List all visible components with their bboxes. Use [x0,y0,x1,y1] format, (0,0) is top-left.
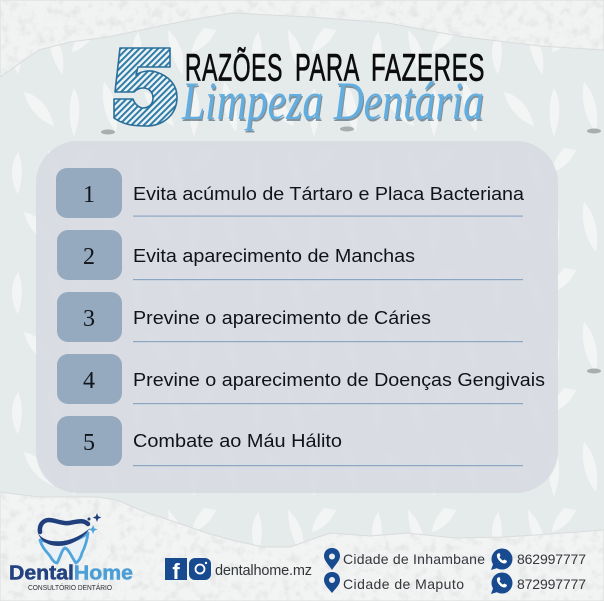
heading line one [185,46,485,90]
phone 2: 872997777 [517,576,586,592]
item 4 [57,354,545,404]
item 3: 3 [83,306,95,332]
item 2 [57,230,523,280]
icon: facebook: f [172,559,180,584]
logo: DentalHome [9,513,133,592]
icon: location pin Inhambane [324,548,340,570]
item 2: Evita aparecimento de Manchas [133,246,415,266]
heading line one: RAZÕES [185,46,283,90]
item 5: 5 [83,430,95,456]
item 2: 2 [83,244,95,270]
item 3: Previne o aparecimento de Cáries [133,308,431,328]
big number 5 [114,48,177,126]
address: Maputo: Cidade de Maputo [343,576,464,592]
icon: location pin Maputo [324,572,340,593]
panel: reasons [36,141,558,493]
heading line two: Limpeza Dentária [181,71,484,131]
icon: facebook [165,558,187,584]
heading line one: PARA [295,48,360,90]
logo wordmark: DentalHome [9,562,133,584]
icon: WhatsApp 1 [491,548,512,570]
logo tagline: CONSULTÓRIO DENTÁRIO [28,583,113,592]
address: Inhambane: Cidade de Inhambane [343,551,485,567]
torn paper top [0,0,604,80]
icon: instagram [189,558,211,580]
item 1: 1 [83,182,95,208]
icon: WhatsApp 2 [491,572,512,594]
torn paper bottom [0,488,604,601]
item 1 [56,168,525,218]
website: dentalhome.mz [215,563,312,579]
heading line two: Limpeza Dentária [182,73,485,133]
item 5: Combate ao Máu Hálito [133,431,342,451]
item 1: Evita acúmulo de Tártaro e Placa Bacteriana [133,184,525,204]
icon: tooth logo [38,513,101,563]
contacts [324,548,586,594]
social media [165,558,312,584]
item 5 [57,416,523,466]
item 3 [57,292,523,342]
item 4: Previne o aparecimento de Doenças Gengivais [133,370,545,390]
item 4: 4 [83,368,95,394]
title [114,46,485,133]
heading line one: FAZERES [371,48,485,90]
phone 1: 862997777 [517,551,586,567]
